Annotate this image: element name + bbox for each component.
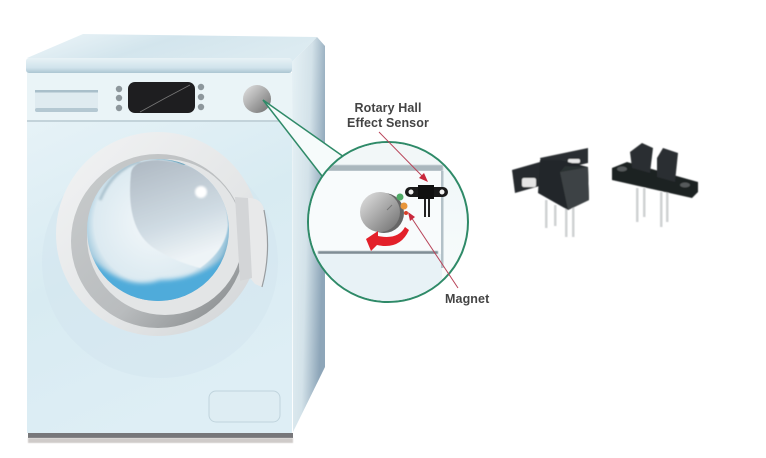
machine front lip <box>26 58 292 73</box>
rotation arrow <box>366 227 409 251</box>
washing machine <box>26 34 325 443</box>
door handle <box>235 197 268 287</box>
slotted towers <box>630 143 653 173</box>
body block <box>538 160 589 210</box>
machine front body <box>27 122 292 433</box>
program buttons left <box>116 86 122 111</box>
dial knob <box>243 85 271 113</box>
filter hatch <box>209 391 280 422</box>
door light inner ring <box>87 159 243 315</box>
magnet <box>396 194 408 215</box>
zoom lens <box>308 132 469 304</box>
hall effect sensor <box>405 185 448 217</box>
pins <box>545 200 574 237</box>
detergent drawer <box>35 90 98 112</box>
base flange <box>612 162 698 198</box>
machine lid <box>27 34 317 62</box>
pins <box>636 188 668 227</box>
door outer ring <box>56 132 260 336</box>
machine control panel <box>27 73 292 122</box>
zoom callout pointer <box>263 100 344 176</box>
door glass <box>85 158 232 310</box>
left tab <box>512 162 543 193</box>
machine side panel <box>292 37 325 432</box>
display screen <box>128 82 195 113</box>
machine base <box>28 433 293 443</box>
leader line: sensor <box>379 132 428 182</box>
lens circle <box>308 142 468 302</box>
door shadow <box>42 146 278 378</box>
label: Magnet: Magnet <box>445 292 490 306</box>
leader line: magnet <box>408 212 458 288</box>
program buttons right <box>198 84 204 110</box>
lens panel detail <box>334 143 442 165</box>
rear flange <box>540 148 588 173</box>
photo: slotted sensor left <box>512 148 589 237</box>
label: Rotary Hall Effect Sensor: Effect Sensor <box>347 116 429 130</box>
photo: slotted sensor right <box>612 143 698 227</box>
door gray ring <box>71 154 245 328</box>
lens knob <box>360 192 404 233</box>
label: Rotary Hall Effect Sensor: Rotary Hall <box>354 101 422 115</box>
